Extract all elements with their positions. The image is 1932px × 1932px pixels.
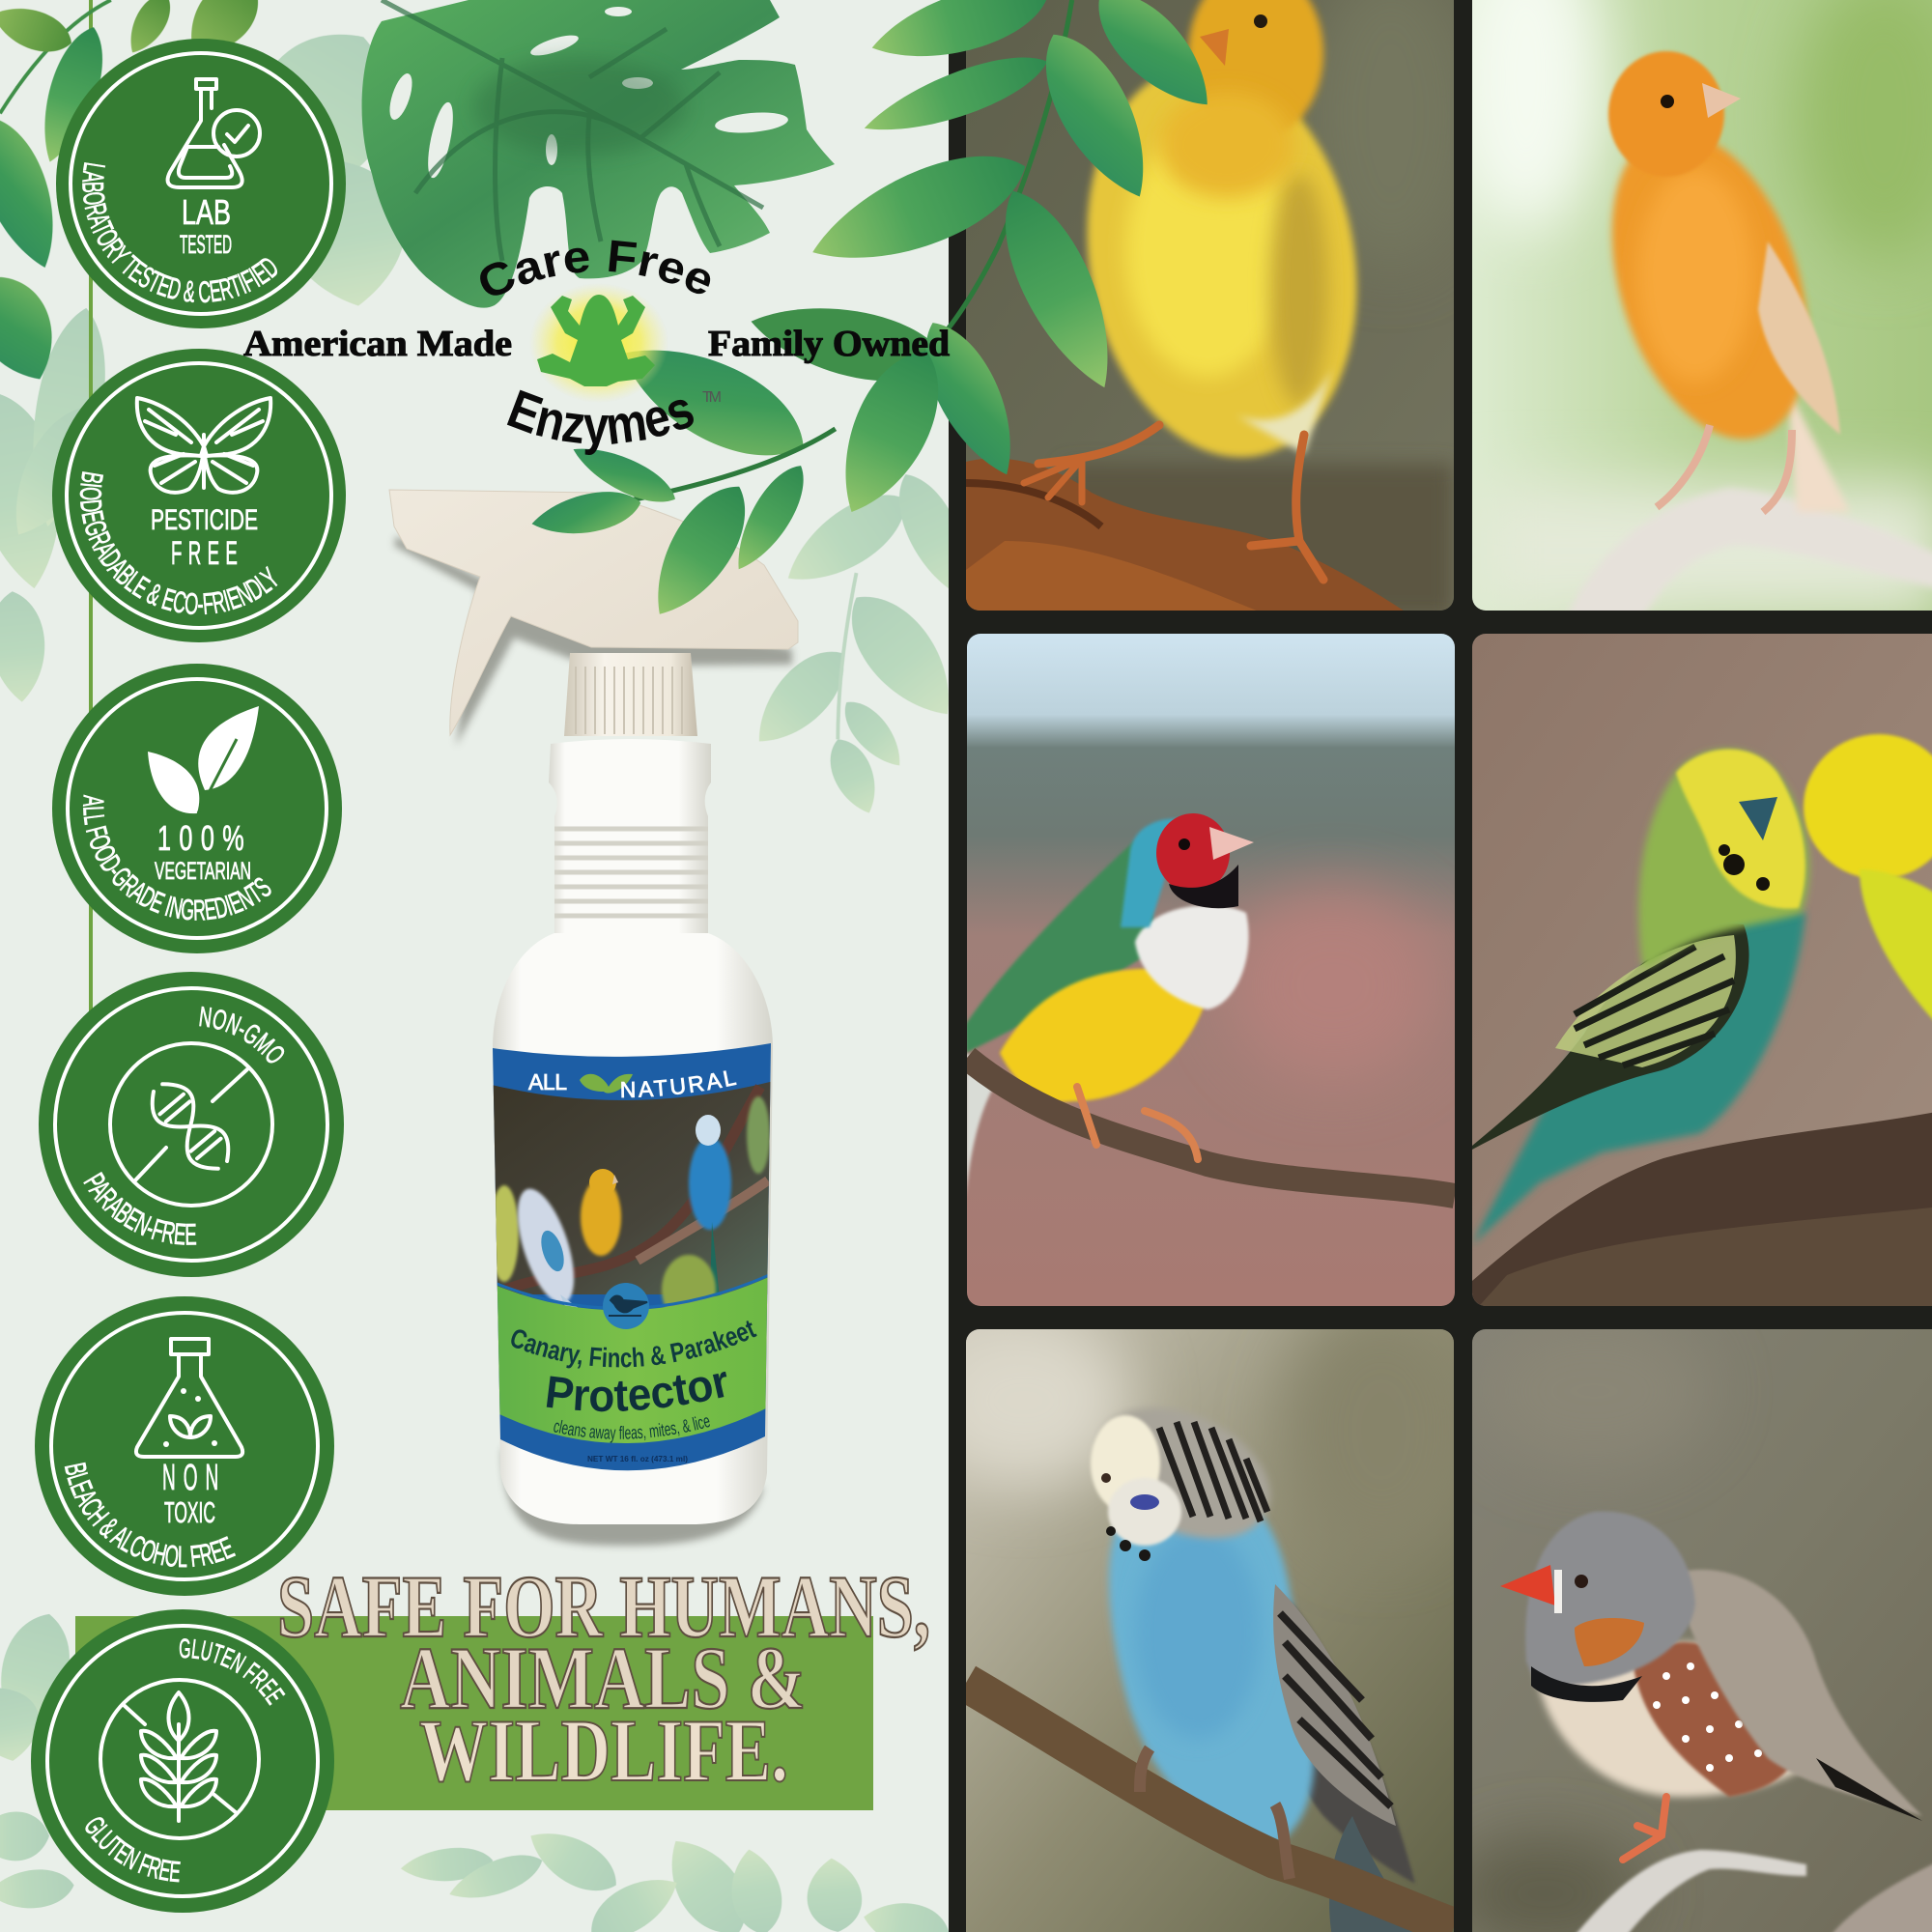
logo: Care Free Enzymes <box>480 240 722 455</box>
label text: protector: Protector <box>547 1372 726 1412</box>
label text: net weight: NET WT 16 fl. oz (473.1 ml) <box>587 1455 688 1463</box>
foreground leaves and branch <box>528 0 1229 631</box>
green headline banner <box>75 1616 873 1810</box>
monstera leaf <box>362 0 835 308</box>
vertical green line <box>89 0 93 1014</box>
badge arc text: LABORATORY TESTED & CERTIFIED <box>82 162 278 303</box>
badge text: paraben-free: PARABEN-FREE <box>83 1171 197 1245</box>
photo panel background <box>949 0 1932 1932</box>
bottle trigger <box>389 490 798 735</box>
label text: all: ALL <box>528 1069 567 1094</box>
badge text: 100%: 100% <box>157 819 252 858</box>
text: American Made: American Made <box>243 324 512 364</box>
badge text: NON: NON <box>162 1458 226 1498</box>
badge arc text: BIODEGRADABLE & ECO-FRIENDLY <box>79 471 278 614</box>
logo glow <box>529 283 668 403</box>
photo: orange canary <box>1449 0 1932 618</box>
badge text: PESTICIDE: PESTICIDE <box>151 504 258 536</box>
badge text: FREE: FREE <box>171 534 243 571</box>
badge text: non-gmo: NON-GMO <box>199 1007 284 1063</box>
top-left foliage <box>0 0 273 394</box>
headline: safe for humans, animals & wildlife <box>277 1557 930 1800</box>
icon: crossed DNA <box>134 1069 247 1181</box>
bottle body <box>493 933 773 1524</box>
label birds and perch <box>490 1087 770 1324</box>
icon: crossed wheat <box>124 1692 237 1821</box>
badge arc text: ALL FOOD-GRADE INGREDIENTS <box>83 794 271 921</box>
badge text: TOXIC: TOXIC <box>164 1495 215 1529</box>
headline: safe for humans, animals & wildlife: SAFE FOR HUMANS, <box>277 1557 930 1656</box>
label text: natural: NATURAL <box>621 1070 737 1097</box>
icon: leaves <box>148 706 259 813</box>
badge text: LAB: LAB <box>182 192 231 232</box>
product spray bottle <box>388 489 798 1524</box>
photo: green budgie <box>1472 634 1932 1314</box>
headline: safe for humans, animals & wildlife: WILDLIFE. <box>419 1701 788 1800</box>
badge arc text: BLEACH & ALCOHOL FREE <box>64 1463 236 1567</box>
badge: non-GMO <box>39 972 344 1277</box>
badge: gluten free <box>31 1571 334 1913</box>
badge text: gluten free bottom: GLUTEN FREE <box>85 1817 181 1882</box>
photo: gouldian finch <box>966 634 1455 1306</box>
bottle shadow <box>394 536 792 1546</box>
label text: tagline: cleans away fleas, mites, & lice <box>554 1416 710 1443</box>
badge: non toxic <box>35 1258 334 1596</box>
badge: lab tested <box>56 39 346 328</box>
bottle cap <box>564 653 697 736</box>
logo frog <box>537 295 655 386</box>
photo: blue budgie <box>966 1329 1454 1932</box>
badge text: TESTED: TESTED <box>180 230 232 259</box>
photo: zebra finch <box>1449 1314 1932 1932</box>
logo text: enzymes: Enzymes <box>506 390 694 455</box>
badge: 100% vegetarian <box>52 664 342 953</box>
text: Family Owned: Family Owned <box>708 324 950 364</box>
badge text: VEGETARIAN: VEGETARIAN <box>155 858 251 885</box>
icon: flask with check <box>168 79 260 187</box>
pale background foliage <box>0 5 985 1932</box>
badge text: gluten free top: GLUTEN FREE <box>180 1638 286 1706</box>
bottle label <box>488 1038 778 1492</box>
icon: flask with leaves <box>136 1339 242 1457</box>
icon: butterfly <box>137 398 270 493</box>
photo: yellow canary <box>966 0 1478 618</box>
bottle neck <box>549 739 711 935</box>
label text: species: Canary, Finch & Parakeet <box>511 1321 757 1369</box>
logo trademark: TM <box>702 389 722 406</box>
label leaf emblem <box>580 1074 633 1094</box>
logo text: care free: Care Free <box>480 240 711 296</box>
headline: safe for humans, animals & wildlife: ANIMALS & <box>400 1629 806 1727</box>
badge: pesticide free <box>52 349 346 642</box>
label bird medallion <box>603 1283 649 1329</box>
